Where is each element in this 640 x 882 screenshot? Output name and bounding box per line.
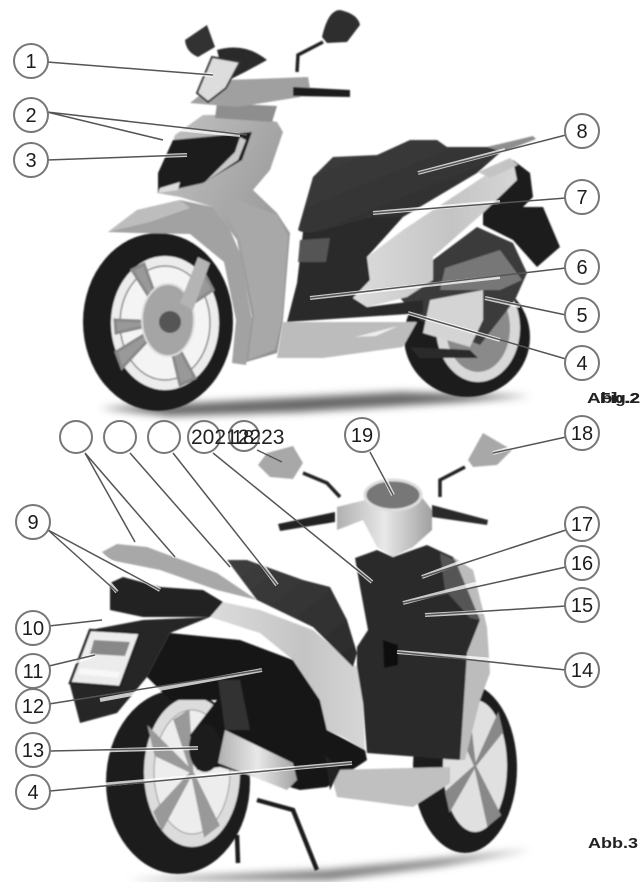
floor: [330, 767, 450, 807]
callout 10: 10: [22, 618, 44, 640]
empty callout circle: [60, 421, 92, 453]
center stand: [237, 800, 317, 870]
front wheel: [83, 233, 233, 411]
callout 9: [16, 505, 50, 539]
left mirror: [258, 446, 303, 479]
silver front shield edge: [445, 557, 490, 760]
callout 1: [14, 44, 48, 78]
side body panel: [210, 602, 365, 750]
callout 14: 14: [571, 660, 593, 682]
floor: [277, 322, 417, 358]
callout 15: [565, 588, 599, 622]
callouts: lower scooter: [16, 416, 599, 809]
under-seat dark panel: [287, 217, 423, 322]
callout 19: [345, 418, 379, 452]
callout 18: 18: [571, 423, 593, 445]
handlebar grips: [278, 512, 335, 531]
figure label: Abb.2 overlapped by Fig.2: Abb.2: [587, 390, 640, 407]
callout 5: [565, 298, 599, 332]
callouts: upper scooter: [14, 44, 599, 380]
front shield: [157, 115, 290, 363]
mirror stem: [297, 42, 323, 72]
callout 16: [565, 546, 599, 580]
right mirror: [322, 10, 360, 43]
callout 10: [16, 611, 50, 645]
figure label: Abb.3: Abb.3: [588, 835, 638, 852]
callout 7: [565, 180, 599, 214]
headlight cluster: [158, 132, 252, 193]
empty callout circle: [148, 421, 180, 453]
scooter: rear three-quarter view: [70, 433, 530, 880]
inner shield dark panel: [355, 545, 480, 760]
callout 2: 2: [25, 105, 37, 127]
callout 4 upper: [565, 346, 599, 380]
callout 17: 17: [571, 514, 593, 536]
callout 15: 15: [571, 595, 593, 617]
callout 5: 5: [576, 305, 588, 327]
engine black void: [147, 633, 367, 790]
callout 3: [14, 143, 48, 177]
callout 16: 16: [571, 553, 593, 575]
ground shadow: [127, 850, 530, 880]
silver rear panel: [353, 160, 517, 307]
scooter: front three-quarter view: [83, 10, 560, 416]
callout 9: 9: [27, 512, 39, 534]
neck: [215, 103, 277, 122]
callout 11: 11: [23, 661, 43, 683]
callout 17: [565, 507, 599, 541]
callout 20 21 22 23 overlapping 18: 20212223: [191, 426, 284, 449]
taillight: [110, 577, 223, 617]
callout 3: 3: [25, 150, 37, 172]
rear mudguard: [483, 160, 560, 267]
callout 6: [565, 250, 599, 284]
callout 13: 13: [22, 740, 44, 762]
callout 4 lower: [16, 775, 50, 809]
callout 12: 12: [22, 696, 44, 718]
callout 13: [16, 733, 50, 767]
seat: [298, 137, 533, 232]
ground shadow: [100, 392, 530, 416]
instrument cluster: [365, 480, 421, 510]
empty callout circle: [104, 421, 136, 453]
rear wheel: [404, 274, 530, 397]
right mirror: [468, 433, 512, 467]
cockpit housing: [337, 495, 432, 557]
callout 4 lower: 4: [27, 782, 39, 804]
callout 7: 7: [576, 187, 588, 209]
rear mudguard: [70, 617, 210, 723]
front wheel: [413, 683, 517, 853]
number plate: [70, 630, 140, 687]
handle grip: [293, 87, 350, 97]
instrument light: [197, 57, 240, 102]
callout 8: 8: [576, 121, 588, 143]
figure label: Abb.2 overlapped by Fig.2: Fig.2: [600, 390, 640, 407]
callout 4 upper: 4: [576, 353, 588, 375]
callout 19: 19: [351, 425, 373, 447]
leader lines with white halos: [47, 62, 566, 791]
rear wheel: [106, 690, 250, 874]
callout 14: [565, 653, 599, 687]
left mirror: [185, 25, 215, 57]
front fender: [108, 200, 252, 365]
handlebar cover: [190, 77, 310, 107]
swing hub: [189, 724, 221, 772]
callout 20 21 22 23 overlapping 18: [188, 421, 284, 453]
windshield dome: [217, 48, 267, 82]
callout 18: [565, 416, 599, 450]
callout 12: [16, 689, 50, 723]
front fork: [180, 257, 210, 310]
exhaust: [218, 730, 297, 790]
callout 11: [16, 654, 50, 688]
callout 20 21 22 23 overlapping 18: 18: [232, 427, 254, 449]
callout 1: 1: [25, 51, 37, 73]
seat: [227, 560, 357, 667]
callout 6: 6: [576, 257, 588, 279]
engine block: [400, 227, 527, 345]
tail light: [478, 158, 518, 178]
rear rack: [487, 136, 536, 152]
rack: [102, 544, 257, 600]
callout 8: [565, 114, 599, 148]
callout 2: [14, 98, 48, 132]
